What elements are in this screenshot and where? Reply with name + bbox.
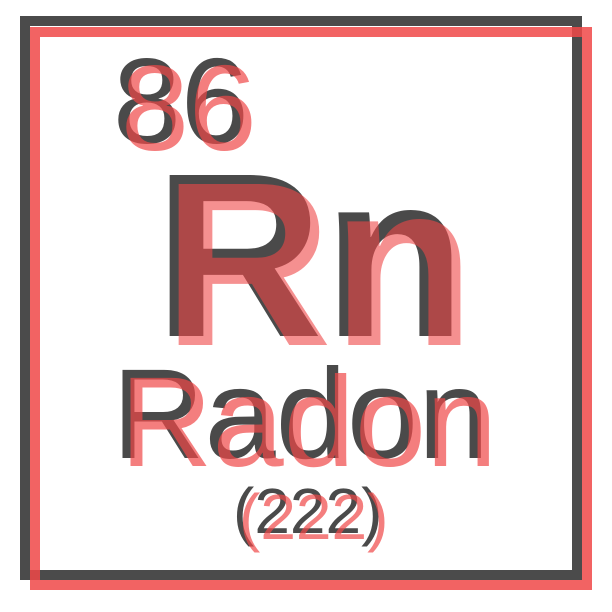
atomic mass (222): (222) <box>239 481 388 553</box>
atomic number 86: 86 <box>121 40 257 176</box>
symbol Rn: Rn <box>154 124 466 386</box>
atomic mass (222): (222) <box>233 475 382 547</box>
name Radon: Radon <box>112 343 489 486</box>
atomic number 86: 86 <box>113 33 249 169</box>
name Radon: Radon <box>120 351 497 494</box>
symbol Rn: Rn <box>163 133 475 395</box>
